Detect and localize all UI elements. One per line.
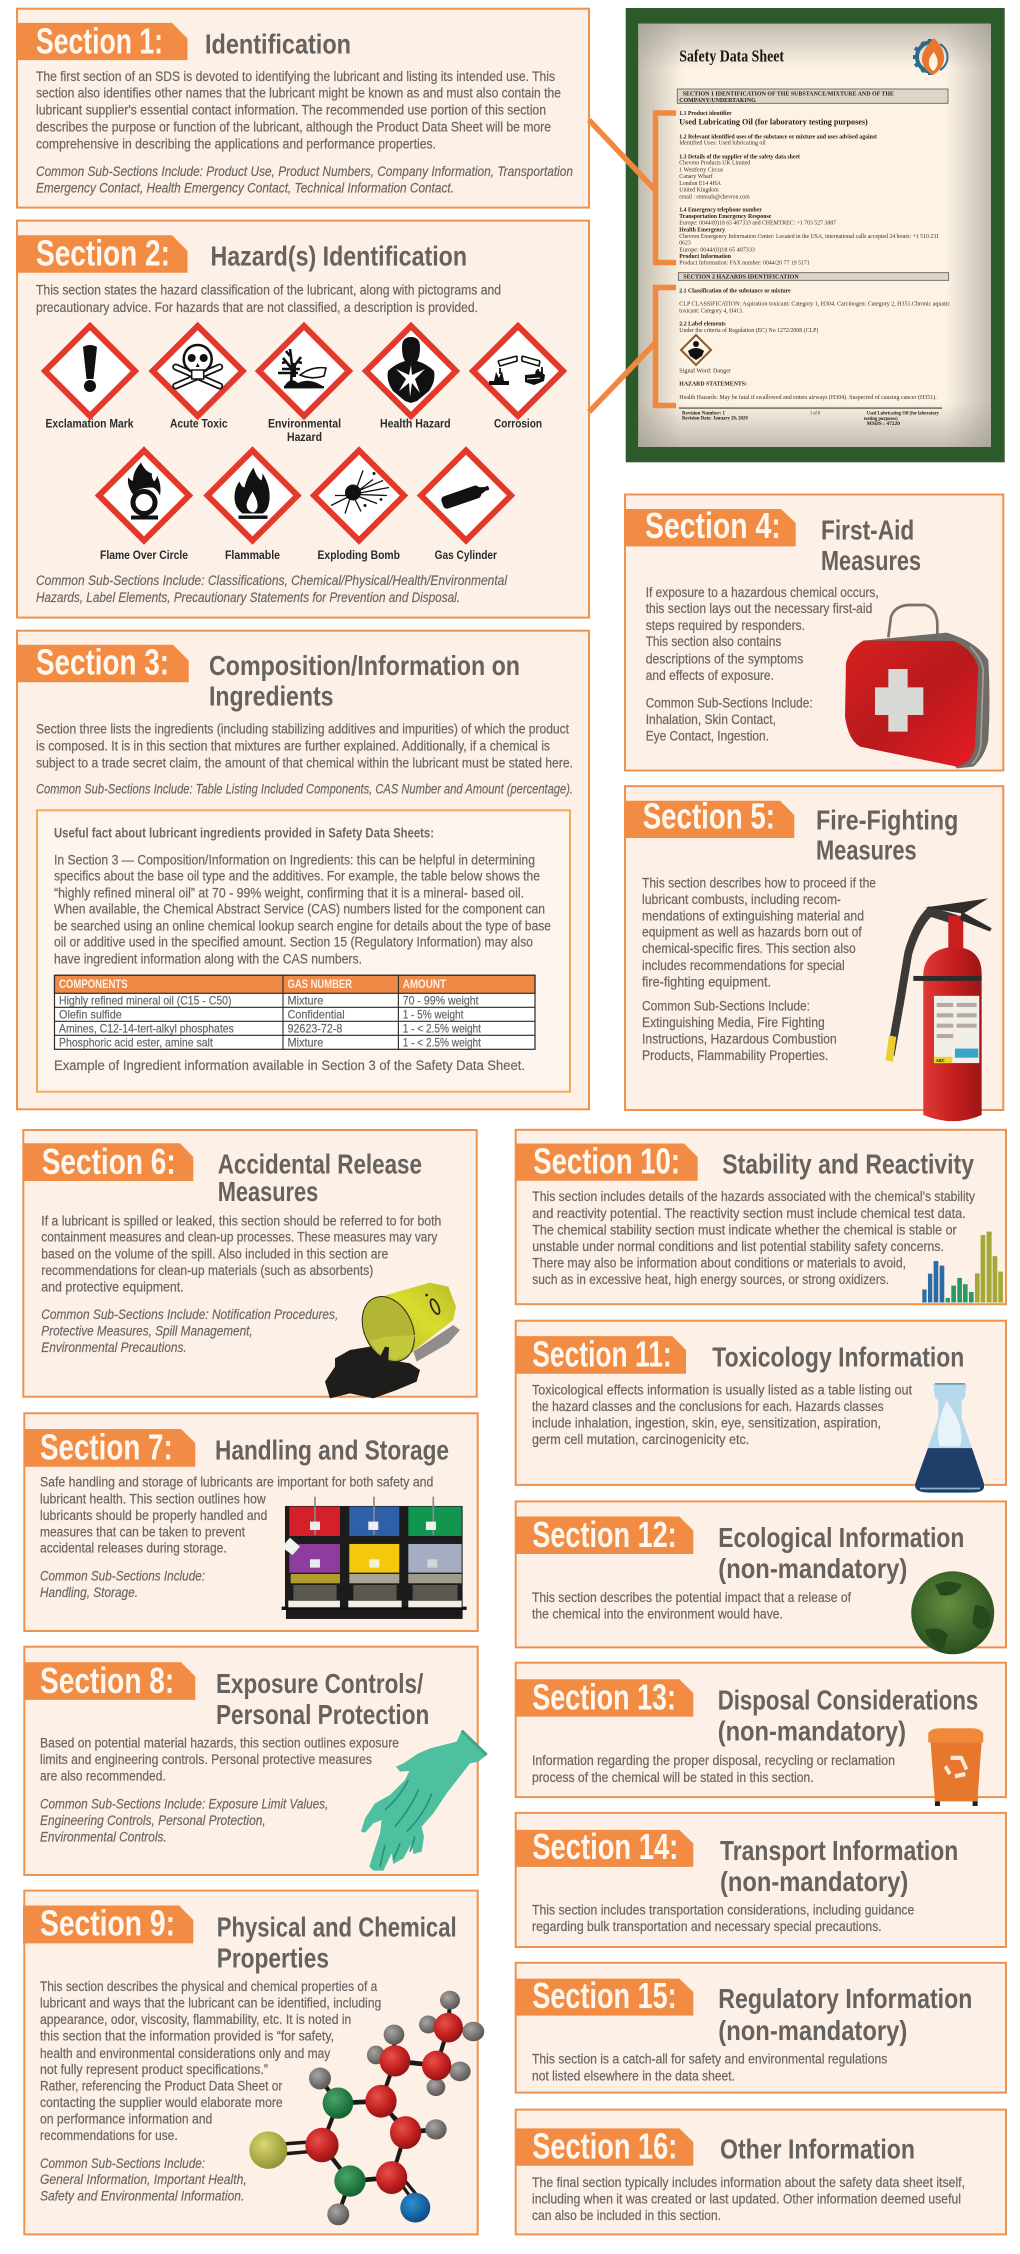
section 9 body text: recommendations for use. — [40, 2128, 178, 2143]
section 9 body text: on performance information and — [40, 2112, 212, 2127]
section 8 body text: are also recommended. — [40, 1769, 166, 1784]
panel: section 7 handling and storage — [24, 1413, 478, 1631]
ingredients table: AMOUNT — [403, 977, 447, 991]
section 5 sub-sections — [642, 999, 837, 1063]
ingredients table: Highly refined mineral oil (C15 - C50) — [59, 994, 232, 1008]
document section 1 text: United Kingdom — [679, 187, 719, 193]
document footer — [679, 408, 942, 427]
section 14 title: (non-mandatory) — [720, 1866, 908, 1897]
section 11 body text: include inhalation, ingestion, skin, eye, sensitization, aspiration, — [532, 1416, 881, 1431]
icon: small health hazard pictogram — [681, 335, 711, 365]
section 6 badge: Section 6: — [42, 1141, 176, 1182]
callout text: “highly refined mineral oil” at 70 - 99% weight, confirming that it is a mineral- based oil. — [54, 885, 524, 900]
section 3 sub-sections: Common Sub-Sections Include: Table Listing Included Components, CAS Number and Amount (percentage). — [36, 782, 573, 797]
ingredients table: 1 - 5% weight — [403, 1007, 464, 1021]
section 13 body text: Information regarding the proper disposal, recycling or reclamation — [532, 1753, 895, 1768]
section 15 body text — [532, 2052, 888, 2083]
callout heading: Useful fact about lubricant ingredients provided in Safety Data Sheets: — [54, 826, 434, 841]
section 1 body text: lubricant supplier's essential contact information. The recommended use portion of this section — [36, 103, 546, 118]
icon: flame over circle — [99, 450, 189, 540]
section 7 body text: lubricant health. This section outlines how — [40, 1491, 266, 1506]
section 11 title: Toxicology Information — [712, 1342, 964, 1373]
document section 1 text: Europe: 0044/(0)18 65 407333 and CHEMTREC: +1 703 527 3887 — [679, 220, 836, 227]
section 16 body text — [532, 2175, 965, 2223]
section 1 sub-sections: Emergency Contact, Health Emergency Contact, Technical Information Contact. — [36, 181, 454, 196]
icon: orange recycling bin — [928, 1728, 983, 1806]
section 14 title: Transport Information — [720, 1835, 958, 1866]
document section 1 text: Identified Uses: Used lubricating oil — [679, 140, 766, 147]
section 1 sub-sections: Common Sub-Sections Include: Product Use, Product Numbers, Company Information, Transportation — [36, 164, 573, 179]
panel: section 8 exposure controls — [24, 1647, 487, 1875]
section 12 body text: the chemical into the environment would have. — [532, 1607, 783, 1622]
section 9 body text: not fully represent product specifications.” — [40, 2062, 268, 2077]
section 9 title: Physical and Chemical — [217, 1911, 457, 1942]
panel: section 1 identification — [17, 9, 589, 208]
icon: gear and flame logo — [913, 38, 948, 75]
section 7 title: Handling and Storage — [215, 1434, 449, 1465]
section 3 body text: is composed. It is in this section that mixtures are further explained. Additionally, if a chemical is — [36, 738, 550, 753]
section 14 body text — [532, 1903, 914, 1934]
section 4 body text: steps required by responders. — [646, 618, 805, 633]
section 6 body text: recommendations for clean-up materials (such as absorbents) — [41, 1263, 373, 1278]
section 9 title: Properties — [217, 1943, 329, 1974]
section 4 badge: Section 4: — [645, 505, 781, 546]
icon: fire extinguisher — [889, 898, 992, 1121]
section 9 body text: health and environmental considerations only and may — [40, 2046, 331, 2061]
section 13 body text: process of the chemical will be stated in this section. — [532, 1770, 814, 1785]
hazard labels row 2 — [100, 550, 497, 562]
section 13 body text — [532, 1753, 895, 1785]
document section 1 text: Transportation Emergency Response — [679, 214, 772, 220]
icon: first aid kit — [845, 605, 989, 768]
callout text: oil or additive used in the specified amount. Section 15 (Regulatory Information) may also — [54, 935, 533, 950]
section 16 badge: Section 16: — [532, 2126, 677, 2166]
document section 2 text: Under the criteria of Regulation (EC) No 1272/2008 (CLP) — [679, 327, 818, 334]
document section 2 text: 2.1 Classification of the substance or mixture — [679, 288, 791, 294]
section 5 badge: Section 5: — [643, 796, 775, 836]
callout text: In Section 3 — Composition/Information on Ingredients: this can be helpful in determining — [54, 852, 535, 867]
section 4 title — [821, 514, 921, 576]
section 1 body text: The first section of an SDS is devoted to identifying the lubricant and listing its intended use. This — [36, 69, 555, 84]
section 9 body text: this section that the information provided is “for safety, — [40, 2028, 334, 2044]
panel: section 9 physical and chemical — [23, 1891, 484, 2234]
section 10 body text: such as in excessive heat, high energy sources, or strong oxidizers. — [532, 1272, 889, 1287]
section 11 body text: the hazard classes and the conclusions for each. Hazards classes — [532, 1399, 884, 1414]
section 1 sub-sections — [36, 164, 573, 196]
section 4 sub-sections: Common Sub-Sections Include: — [646, 695, 813, 710]
section 6 body text: If a lubricant is spilled or leaked, this section should be referred to for both — [41, 1213, 441, 1228]
icon: corrosion — [473, 326, 563, 416]
document section 1 text: Chevron Emergency Information Center: Located in the USA, international calls accepted 24 hours: +1 510 231 — [679, 233, 939, 240]
section 6 body text — [41, 1213, 441, 1294]
panel: section 10 stability and reactivity — [516, 1130, 1006, 1304]
ingredients table: Amines, C12-14-tert-alkyl phosphates — [59, 1022, 234, 1036]
document section 2 text: 2.2 Label elements — [679, 321, 726, 327]
document section 1 text — [679, 111, 939, 267]
section 4 body text: descriptions of the symptoms — [646, 651, 804, 666]
document section 1 text: Health Emergency — [679, 227, 725, 233]
callout text: specifics about the base oil type and the additives. For example, the table below shows the — [54, 869, 540, 884]
icon: acute toxic — [153, 326, 243, 416]
section 6 title: Measures — [218, 1176, 318, 1207]
document heading: Safety Data Sheet — [679, 46, 784, 66]
document section 1 text: London E14 4HA — [679, 181, 722, 187]
section 5 sub-sections: Extinguishing Media, Fire Fighting — [642, 1015, 825, 1030]
section 16 title: Other Information — [720, 2134, 915, 2164]
document footer: Used Lubricating Oil (for laboratory — [867, 411, 939, 416]
icon: gas cylinder — [421, 450, 511, 540]
table caption: Example of Ingredient information available in Section 3 of the Safety Data Sheet. — [54, 1058, 525, 1073]
icon: exploding bomb — [314, 450, 404, 540]
document footer: MSDS : 47220 — [867, 422, 901, 427]
section 5 title: Fire-Fighting — [816, 804, 958, 835]
section 2 title: Hazard(s) Identification — [210, 241, 467, 272]
icon: green protective glove — [361, 1731, 487, 1871]
section 5 body text: lubricant combusts, including recom- — [642, 892, 841, 907]
section 5 title — [816, 804, 958, 866]
section 12 title — [718, 1522, 964, 1584]
section 16 body text: can also be included in this section. — [532, 2208, 721, 2223]
section 4 sub-sections — [646, 695, 813, 744]
section 8 sub-sections: Common Sub-Sections Include: Exposure Limit Values, — [40, 1796, 328, 1811]
callout text — [54, 852, 551, 966]
section 5 body text — [642, 876, 876, 990]
section 4 body text: This section also contains — [646, 634, 782, 649]
section 2 sub-sections — [36, 573, 508, 605]
document section 1 text: Product Information: FAX number: 0044/20 77 19 5171 — [679, 260, 810, 267]
section 6 sub-sections: Environmental Precautions. — [41, 1340, 187, 1355]
section 2 body text — [36, 283, 501, 315]
ingredients table: COMPONENTS — [59, 977, 128, 991]
document section 1 header: COMPANY/UNDERTAKING — [679, 98, 756, 104]
document section 1 text: email : emmsds@chevron.com — [679, 194, 750, 200]
section 3 title: Ingredients — [209, 681, 334, 712]
section 14 title — [720, 1835, 958, 1897]
section 2 sub-sections: Hazards, Label Elements, Precautionary Statements for Prevention and Disposal. — [36, 590, 460, 605]
section 5 sub-sections: Common Sub-Sections Include: — [642, 999, 810, 1014]
section 8 sub-sections — [40, 1796, 328, 1844]
section 14 body text: This section includes transportation considerations, including guidance — [532, 1903, 914, 1918]
panel: section 4 first-aid — [625, 494, 1003, 770]
callout text: When available, the Chemical Abstract Service (CAS) numbers listed for the component can — [54, 902, 545, 917]
arrow: bracket connecting section 1 to document — [589, 113, 676, 262]
section 1 title: Identification — [205, 28, 351, 59]
section 8 body text: Based on potential material hazards, this section outlines exposure — [40, 1736, 399, 1751]
section 10 body text: and reactivity potential. The reactivity section must include chemical test data. — [532, 1206, 966, 1221]
document section 1 text: 1.1 Product identifier — [679, 111, 732, 117]
section 15 title: Regulatory Information — [718, 1983, 972, 2014]
section 13 title: (non-mandatory) — [718, 1716, 906, 1746]
section 1 body text: section also identifies other names that the lubricant might be known as and must also contain the — [36, 86, 561, 101]
section 4 body text: this section lays out the necessary first-aid — [646, 601, 872, 616]
section 5 body text: chemical-specific fires. This section also — [642, 941, 856, 956]
ingredients table: 92623-72-8 — [288, 1022, 343, 1036]
document section 1 text: Used Lubricating Oil (for laboratory testing purposes) — [679, 117, 868, 127]
section 11 body text — [532, 1383, 912, 1447]
chart: bar chart icon — [922, 1232, 1003, 1302]
document section 2 text: Signal Word: Danger — [679, 368, 731, 374]
section 7 badge: Section 7: — [40, 1426, 173, 1467]
section 6 title: Accidental Release — [218, 1148, 422, 1179]
panel: section 15 regulatory — [516, 1963, 1006, 2093]
section 8 sub-sections: Environmental Controls. — [40, 1829, 167, 1844]
ingredients table — [54, 975, 535, 1049]
icon: lubricant storage rack — [282, 1497, 467, 1619]
section 9 body text: contacting the supplier would elaborate more — [40, 2095, 283, 2110]
document footer: Revision Date: January 20, 2020 — [682, 417, 748, 422]
section 5 sub-sections: Instructions, Hazardous Combustion — [642, 1032, 837, 1046]
section 13 badge: Section 13: — [532, 1677, 676, 1718]
document section 2 header: SECTION 2 HAZARDS IDENTIFICATION — [683, 275, 799, 281]
hazard labels row 1: Environmental — [268, 418, 341, 430]
icon: health hazard — [366, 326, 456, 416]
panel: section 16 other information — [516, 2110, 1006, 2234]
panel: safety data sheet document — [626, 8, 1005, 462]
section 10 badge: Section 10: — [533, 1141, 680, 1182]
section 9 badge: Section 9: — [40, 1903, 175, 1944]
ingredients table: Phosphoric acid ester, amine salt — [59, 1035, 213, 1049]
section 2 body text: This section states the hazard classification of the lubricant, along with pictograms and — [36, 283, 501, 298]
ingredients table: 1 - < 2.5% weight — [403, 1035, 482, 1049]
section 4 title: Measures — [821, 545, 921, 576]
icon: spilled yellow barrel — [325, 1283, 460, 1398]
icon: flammable — [208, 450, 298, 540]
document section 1 text: 1.3 Details of the supplier of the safety data sheet — [679, 154, 800, 160]
section 2 sub-sections: Common Sub-Sections Include: Classifications, Chemical/Physical/Health/Environmental — [36, 573, 508, 588]
document section 2 text: Health Hazards: May be fatal if swallowed and enters airways (H304). Suspected of causing cancer (H351). — [679, 394, 937, 401]
section 9 title — [217, 1911, 457, 1974]
callout text: be searched using an online chemical lookup search engine for details about the type of base — [54, 918, 551, 933]
section 1 body text: describes the purpose or function of the lubricant, although the Product Data Sheet will be more — [36, 119, 551, 134]
hazard labels row 2: Exploding Bomb — [318, 550, 400, 562]
section 6 sub-sections — [41, 1307, 338, 1355]
section 5 title: Measures — [816, 835, 917, 866]
section 7 body text: Safe handling and storage of lubricants are important for both safety and — [40, 1475, 433, 1490]
section 4 body text: and effects of exposure. — [646, 668, 774, 683]
section 6 body text: containment measures and clean-up processes. These measures may vary — [41, 1230, 438, 1245]
section 16 body text: including when it was created or last updated. Other information deemed useful — [532, 2192, 961, 2206]
section 15 badge: Section 15: — [532, 1975, 677, 2016]
section 2 body text: precautionary advice. For hazards that are not classified, a description is provided. — [36, 300, 478, 315]
section 6 title — [218, 1148, 422, 1207]
section 11 badge: Section 11: — [532, 1334, 672, 1375]
section 5 body text: This section describes how to proceed if the — [642, 876, 876, 890]
section 12 badge: Section 12: — [532, 1514, 677, 1555]
panel: section 3 composition — [17, 631, 589, 1109]
section 8 title: Exposure Controls/ — [216, 1668, 424, 1699]
section 8 badge: Section 8: — [40, 1660, 174, 1701]
ingredients table: GAS NUMBER — [288, 977, 352, 991]
arrow: bracket connecting section 2 to document — [589, 288, 676, 412]
section 2 badge: Section 2: — [36, 233, 170, 274]
panel: section 12 ecological — [516, 1501, 1006, 1654]
panel: section 2 hazard identification — [17, 221, 589, 618]
section 11 body text: Toxicological effects information is usually listed as a table listing out — [532, 1383, 912, 1398]
section 14 badge: Section 14: — [532, 1826, 678, 1867]
section 10 body text: There may also be information about conditions or materials to avoid, — [532, 1256, 906, 1271]
section 8 body text — [40, 1736, 399, 1784]
section 8 sub-sections: Engineering Controls, Personal Protection, — [40, 1813, 266, 1828]
section 1 badge: Section 1: — [36, 20, 163, 61]
section 16 body text: The final section typically includes information about the safety data sheet itself, — [532, 2175, 965, 2190]
document section 2 text: HAZARD STATEMENTS: — [679, 382, 747, 388]
section 7 body text: accidental releases during storage. — [40, 1541, 227, 1556]
hazard labels row 1: Corrosion — [494, 418, 542, 430]
panel: section 14 transport — [516, 1813, 1006, 1947]
document section 2 header — [678, 273, 949, 281]
section 4 sub-sections: Eye Contact, Ingestion. — [646, 729, 769, 744]
section 3 body text — [36, 722, 573, 770]
section 4 title: First-Aid — [821, 514, 914, 545]
section 9 sub-sections: Safety and Environmental Information. — [40, 2189, 244, 2204]
section 15 body text: not listed elsewhere in the data sheet. — [532, 2068, 735, 2083]
section 12 title: Ecological Information — [718, 1522, 964, 1553]
section 3 body text: subject to a trade secret claim, the amount of that chemical within the lubricant must be stated here. — [36, 755, 573, 770]
document section 2 text: toxicant: Category 4, H413. — [679, 308, 744, 314]
section 5 body text: mendations of extinguishing material and — [642, 909, 864, 924]
section 7 sub-sections — [40, 1568, 205, 1600]
panel: section 6 accidental release — [23, 1130, 477, 1398]
section 9 body text — [40, 1979, 381, 2143]
section 1 body text — [36, 69, 561, 152]
document section 2 text — [679, 288, 950, 401]
document section 1 header: SECTION 1 IDENTIFICATION OF THE SUBSTANCE/MIXTURE AND OF THE — [683, 92, 894, 98]
callout text: have ingredient information along with the CAS numbers. — [54, 951, 362, 966]
panel: section 11 toxicology — [516, 1321, 1006, 1493]
section 9 body text: This section describes the physical and chemical properties of a — [40, 1979, 378, 1994]
section 9 sub-sections: Common Sub-Sections Include: — [40, 2156, 205, 2171]
document footer: testing purposes) — [864, 417, 898, 422]
section 3 title — [209, 650, 520, 712]
section 6 sub-sections: Common Sub-Sections Include: Notification Procedures, — [41, 1307, 338, 1322]
ingredients table: Confidential — [288, 1007, 345, 1021]
section 7 sub-sections: Handling, Storage. — [40, 1585, 138, 1600]
document section 1 text: 1.2 Relevant identified uses of the substance or mixture and uses advised against — [679, 134, 877, 140]
hazard labels row 2: Flame Over Circle — [100, 550, 188, 562]
section 8 body text: limits and engineering controls. Personal protective measures — [40, 1752, 372, 1767]
document footer: 1 of 8 — [810, 411, 820, 416]
document section 1 text: Canary Wharf — [679, 173, 713, 180]
section 14 body text: regarding bulk transportation and necessary special precautions. — [532, 1919, 882, 1934]
section 4 body text: If exposure to a hazardous chemical occurs, — [646, 585, 879, 600]
section 10 title: Stability and Reactivity — [722, 1149, 975, 1180]
section 10 body text: The chemical stability section must indicate whether the chemical is stable or — [532, 1223, 957, 1238]
ingredients table: Mixture — [288, 1035, 324, 1049]
section 1 body text: comprehensive in describing the applications and performance properties. — [36, 137, 436, 152]
section 3 body text: Section three lists the ingredients (including stabilizing additives and impurities) of which the product — [36, 722, 569, 737]
icon: exclamation mark — [45, 326, 135, 416]
section 5 sub-sections: Products, Flammability Properties. — [642, 1048, 828, 1063]
section 8 title — [216, 1668, 429, 1730]
section 10 body text: unstable under normal conditions and list potential stability safety concerns. — [532, 1239, 944, 1254]
section 9 body text: Rather, referencing the Product Data Sheet or — [40, 2079, 283, 2094]
panel: section 5 fire-fighting — [625, 786, 1003, 1121]
section 12 body text: This section describes the potential impact that a release of — [532, 1590, 851, 1605]
section 11 body text: germ cell mutation, carcinogenicity etc. — [532, 1432, 749, 1447]
section 9 sub-sections — [40, 2156, 247, 2204]
section 4 sub-sections: Inhalation, Skin Contact, — [646, 712, 776, 727]
hazard labels row 2: Gas Cylinder — [435, 550, 497, 562]
document section 1 text: 1 Westferry Circus — [679, 167, 724, 174]
ingredients table: Mixture — [288, 994, 324, 1008]
section 5 body text: equipment as well as hazards born out of — [642, 924, 862, 939]
section 9 body text: lubricant and ways that the lubricant can be identified, including — [40, 1996, 381, 2011]
section 4 body text — [646, 585, 879, 683]
section 5 body text: includes recommendations for special — [642, 958, 845, 973]
hazard labels row 1: Hazard — [287, 432, 322, 444]
section 15 body text: This section is a catch-all for safety and environmental regulations — [532, 2052, 888, 2067]
section 6 sub-sections: Protective Measures, Spill Management, — [41, 1323, 253, 1338]
document section 2 text: CLP CLASSIFICATION: Aspiration toxicant: Category 1, H304. Carcinogen: Category 2, H351.Chronic aquatic — [679, 302, 950, 308]
document section 1 text: Europe: 0044/(0)18 65 407333 — [679, 246, 755, 253]
document section 1 text: Product Information — [679, 254, 732, 260]
section 3 title: Composition/Information on — [209, 650, 520, 681]
document section 1 header — [677, 89, 948, 104]
callout: useful fact box — [37, 810, 570, 1092]
document section 1 text: Chevron Products UK Limited — [679, 161, 750, 167]
document section 1 text: 0623 — [679, 241, 691, 247]
section 5 body text: fire-fighting equipment. — [642, 975, 771, 990]
section 13 title — [718, 1685, 978, 1746]
section 10 body text — [532, 1189, 975, 1287]
section 6 body text: and protective equipment. — [41, 1279, 184, 1294]
section 3 badge: Section 3: — [36, 641, 169, 682]
document section 1 text: 1.4 Emergency telephone number — [679, 207, 762, 213]
section 7 body text: measures that can be taken to prevent — [40, 1524, 245, 1539]
hazard labels row 2: Flammable — [225, 550, 280, 562]
document footer: Revision Number: 1 — [682, 411, 725, 416]
icon: environmental hazard — [259, 326, 349, 416]
section 8 title: Personal Protection — [216, 1699, 429, 1730]
section 12 body text — [532, 1590, 851, 1622]
panel: section 13 disposal — [516, 1663, 1006, 1806]
section 7 body text: lubricants should be properly handled and — [40, 1508, 267, 1523]
icon: molecule model — [249, 1991, 484, 2225]
ingredients table: Olefin sulfide — [59, 1007, 122, 1021]
hazard labels row 1: Acute Toxic — [170, 418, 228, 430]
section 15 title: (non-mandatory) — [718, 2015, 907, 2046]
section 9 sub-sections: General Information, Important Health, — [40, 2172, 247, 2187]
section 7 sub-sections: Common Sub-Sections Include: — [40, 1568, 205, 1583]
section 9 body text: appearance, odor, viscosity, flammability, etc. It is noted in — [40, 2012, 351, 2027]
hazard labels row 1: Health Hazard — [380, 418, 451, 430]
ingredients table: 1 - < 2.5% weight — [403, 1022, 482, 1036]
section 12 title: (non-mandatory) — [718, 1553, 907, 1584]
icon: chemistry flask — [915, 1384, 984, 1493]
icon: green globe — [911, 1571, 994, 1654]
section 6 body text: based on the volume of the spill. Also included in this section are — [41, 1246, 388, 1261]
icon: fire extinguisher: ABC — [936, 1058, 945, 1063]
section 15 title — [718, 1983, 972, 2046]
hazard labels row 1 — [46, 418, 542, 444]
hazard labels row 1: Exclamation Mark — [46, 418, 134, 430]
ingredients table: 70 - 99% weight — [403, 994, 479, 1008]
section 10 body text: This section includes details of the hazards associated with the chemical's stability — [532, 1189, 975, 1204]
section 7 body text — [40, 1475, 433, 1556]
